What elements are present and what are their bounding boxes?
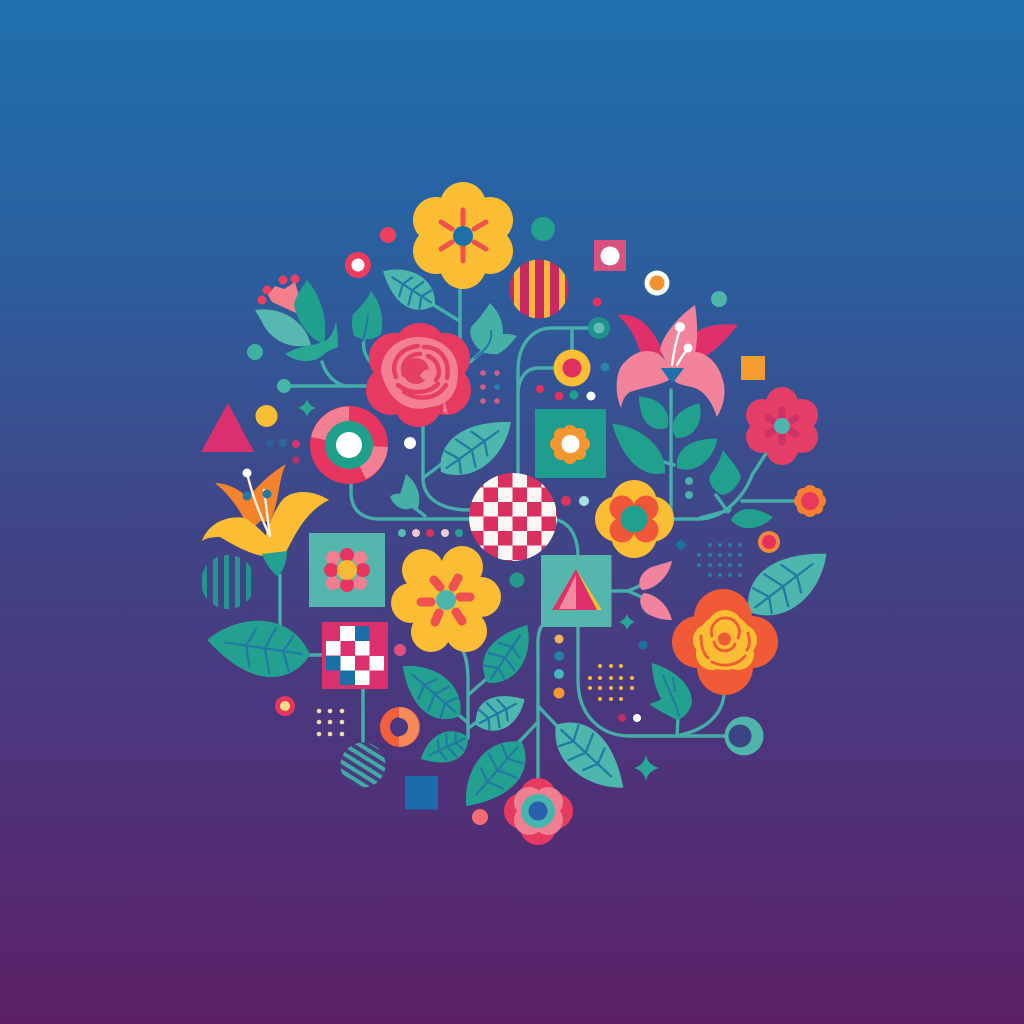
sparkle: mid: [619, 614, 635, 630]
small red flower: [345, 252, 371, 278]
dot: small red: [592, 298, 602, 306]
node circle: [588, 317, 610, 339]
dot: teal right top: [711, 291, 727, 307]
leaf: upper left of rose: [374, 258, 444, 319]
diamond: blue: [675, 539, 687, 551]
flower: central rose: [366, 323, 471, 427]
vertical dots: [554, 634, 564, 698]
striped circle: diagonal: [340, 742, 386, 788]
dot: teal left: [247, 344, 263, 360]
sparkle left: [298, 399, 316, 417]
leaf: mid left: [390, 652, 473, 731]
dot: red top: [380, 227, 396, 243]
flower: yellow with red lobes: [595, 480, 674, 558]
leaf: small dark above rose: [352, 291, 382, 342]
flower: red right: [746, 387, 818, 465]
pink square with white dot: [594, 240, 626, 271]
yellow ring with red centre: [554, 350, 590, 386]
striped circle: teal: [201, 555, 255, 609]
leaf: lobed right of stem: [470, 303, 517, 358]
orange square: [741, 356, 765, 380]
leaf: small lobed: [390, 474, 419, 509]
white ring with orange dot: [644, 270, 670, 296]
dot: blue: [638, 640, 648, 650]
blue square: [405, 776, 438, 810]
flower: yellow middle: [391, 546, 501, 652]
leaf: large right: [734, 534, 841, 631]
flower: left yellow lily: [202, 464, 329, 576]
sparkle: bottom right: [634, 755, 659, 781]
small dots: left: [266, 439, 300, 464]
target circle: [310, 406, 388, 484]
dot grid: near rose: [480, 370, 500, 404]
dot grid: teal: [697, 543, 742, 577]
flower: top yellow: [413, 182, 513, 289]
leaf: mid right lower: [468, 684, 532, 739]
leaf: lower left: [415, 724, 474, 773]
leaf: lower large: [450, 728, 539, 821]
dot: teal small: [600, 362, 610, 372]
dot: white: [404, 437, 416, 449]
flower: orange rose: [672, 589, 778, 695]
leaf: lobed above connector: [649, 663, 692, 720]
dot: pink: [394, 644, 406, 656]
flower: left tulip bud: [255, 274, 338, 361]
dots below yellow ring: [536, 385, 596, 400]
checker square: [322, 622, 388, 689]
leaf: large left: [203, 613, 314, 683]
ring: orange: [385, 707, 419, 747]
ring: connector end: [724, 716, 764, 756]
node dot: line end: [277, 379, 291, 393]
dot grid: cream: [317, 709, 344, 736]
dot: yellow: [256, 405, 278, 427]
dot grid: yellow: [588, 664, 634, 701]
dot row: [398, 529, 463, 537]
dot: red with yellow centre: [275, 696, 295, 716]
dots: red and pale: [561, 496, 589, 506]
leaf: bottom right: [541, 709, 638, 803]
triangle: crimson: [201, 403, 254, 452]
checker circle: [469, 473, 557, 561]
green square with orange flower: [535, 409, 606, 478]
stems and connector lines: [280, 289, 794, 780]
teal square with triangle: [541, 555, 612, 627]
dot: dark teal: [510, 572, 524, 588]
dots: red white: [618, 714, 641, 722]
dot: teal top: [531, 217, 555, 241]
flower: pink lily: [617, 305, 738, 417]
teal square with flower: [309, 533, 385, 607]
flower: small orange right: [794, 485, 826, 517]
dot: salmon: [472, 809, 488, 825]
leaf: mid right upper: [472, 614, 542, 693]
ring: orange red: [758, 531, 780, 553]
pink leaves: [639, 561, 672, 620]
dots: teal pair: [685, 477, 693, 499]
leaf: right of rose stem: [429, 405, 523, 489]
striped circle: yellow red: [510, 260, 568, 318]
flower: bottom: [504, 778, 573, 845]
lily leaves: [602, 389, 774, 529]
